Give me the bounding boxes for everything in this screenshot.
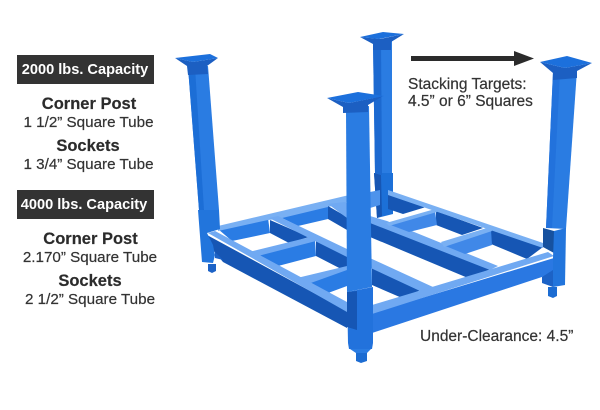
left rail	[207, 231, 347, 328]
label: 2000 lbs capacity: 2000 lbs. Capacity	[22, 62, 149, 78]
text block: 4000 lbs corner post: Corner Post	[43, 230, 138, 248]
left rear corner post	[175, 54, 223, 273]
text block: 2000 lbs sockets: Sockets	[56, 137, 120, 155]
front rail	[372, 252, 554, 333]
back corner post	[360, 32, 404, 218]
callout: stacking targets	[408, 76, 533, 110]
text block: 4000 lbs sockets: 2 1/2” Square Tube	[25, 291, 155, 308]
callout: stacking targets: Stacking Targets:	[408, 76, 527, 93]
label: 4000 lbs capacity: 4000 lbs. Capacity	[21, 197, 148, 213]
text block: 2000 lbs corner post	[23, 95, 154, 131]
inner longitudinal beam	[328, 202, 498, 278]
text block: 2000 lbs corner post: 1 1/2” Square Tube	[23, 114, 154, 131]
arrow to stacking target	[411, 51, 534, 66]
text block: 2000 lbs sockets: 1 3/4” Square Tube	[23, 156, 154, 173]
right cross beams	[386, 209, 492, 254]
text block: 4000 lbs corner post: 2.170” Square Tube	[23, 249, 157, 266]
text block: 4000 lbs sockets	[25, 272, 155, 308]
callout: stacking targets: 4.5” or 6” Squares	[408, 93, 533, 110]
right corner post and socket	[540, 56, 592, 298]
front corner post and socket	[327, 92, 384, 363]
rear left rail	[218, 190, 380, 241]
text block: 4000 lbs sockets: Sockets	[58, 272, 122, 290]
text block: 4000 lbs corner post	[23, 230, 157, 266]
text block: 2000 lbs sockets	[23, 137, 154, 173]
text block: 2000 lbs corner post: Corner Post	[42, 95, 137, 113]
label: 4000 lbs capacity	[17, 190, 154, 219]
callout: under-clearance: Under-Clearance: 4.5”	[420, 328, 573, 345]
outer longitudinal beam	[269, 216, 433, 298]
left cross beams	[249, 237, 347, 293]
rear right rail	[388, 190, 543, 259]
illustration: blue stacking rack	[175, 32, 592, 363]
label: 2000 lbs capacity	[17, 55, 154, 84]
